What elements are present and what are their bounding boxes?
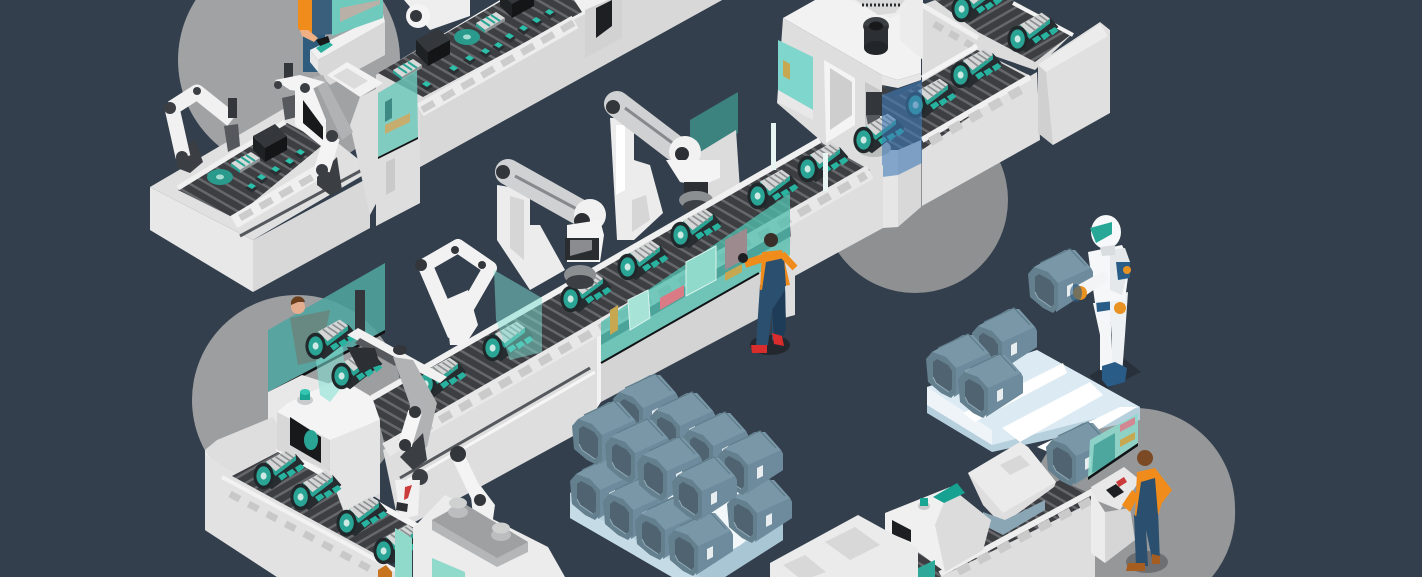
right wall — [922, 72, 1040, 206]
lower link and base — [317, 157, 342, 195]
grey circle: bottom right — [1030, 408, 1235, 577]
long side wall — [376, 0, 722, 226]
crate held — [1028, 249, 1093, 313]
white posts — [771, 123, 776, 170]
spindle — [866, 92, 882, 116]
black cylinder — [863, 17, 889, 35]
back rail — [372, 140, 820, 398]
machine: top left conveyor — [376, 0, 722, 226]
machine: central long conveyor — [372, 123, 883, 530]
machine: bottom right conveyor — [770, 422, 1111, 577]
control console: top left — [310, 0, 385, 85]
machine: right tall unit and conveyors — [777, 0, 1110, 228]
centre block with arm: top left — [274, 62, 383, 215]
block — [327, 62, 383, 97]
head — [1091, 215, 1121, 249]
part on screen — [305, 320, 356, 359]
pallet: left stack of crates — [570, 374, 792, 577]
front rail — [386, 172, 870, 450]
robot arm: bottom left foreground — [395, 406, 428, 520]
control console: bottom right — [1091, 467, 1140, 563]
tall machine — [783, 0, 921, 80]
worker: bottom right — [1122, 450, 1172, 573]
blue glass screen: tall machine — [882, 80, 922, 177]
machine: first short conveyor base — [150, 105, 372, 292]
torso — [1088, 245, 1130, 303]
base — [205, 417, 400, 577]
part under gripper — [331, 350, 382, 389]
holographic screen: top left — [378, 70, 418, 159]
holographic screen: bottom right — [1088, 413, 1138, 480]
parts on belts — [1007, 13, 1058, 52]
arm — [1078, 270, 1108, 298]
inspection unit — [277, 378, 380, 440]
block one — [770, 515, 918, 577]
block three — [968, 442, 1056, 525]
teal beacon — [297, 395, 313, 405]
top conveyor belt — [378, 0, 612, 97]
control panel dots — [856, 0, 905, 15]
grey circle: centre right — [822, 107, 1008, 293]
upper roller arm — [404, 0, 470, 30]
top belt items — [416, 28, 450, 66]
pallet: upper right with crates — [926, 308, 1140, 455]
legs — [1093, 303, 1120, 372]
crate on belt — [1046, 422, 1111, 486]
part under spindle — [857, 139, 891, 157]
holographic screen: central conveyor — [601, 193, 790, 363]
robot arm: centre gantry — [496, 165, 606, 290]
robot arm: left white arm — [415, 246, 490, 345]
lower grooves — [400, 368, 590, 478]
grey circle: bottom left — [192, 295, 402, 505]
gripper and window column — [284, 63, 293, 83]
end block — [585, 0, 622, 58]
block two — [885, 487, 991, 572]
parts on lower belt — [253, 450, 304, 489]
light beam — [316, 345, 345, 402]
worker: middle with red shoes — [738, 233, 795, 355]
belt — [232, 452, 416, 562]
robot arm: far gantry with dim screen — [606, 92, 740, 240]
worker: top left — [298, 0, 332, 72]
machine: bottom left — [205, 263, 424, 577]
parts on belt — [797, 143, 848, 182]
wall under rail, left part — [383, 330, 597, 530]
wall under screen, right part — [601, 235, 793, 402]
holographic beam: central conveyor — [494, 270, 542, 360]
grey band — [313, 75, 353, 140]
belt — [373, 142, 870, 445]
robot: humanoid carrying crate — [1028, 215, 1141, 390]
holographic screen with operator — [268, 263, 385, 392]
upper white arm — [275, 75, 325, 92]
grey circle: top left — [178, 0, 400, 171]
machine: bottom left turntable section — [378, 446, 565, 577]
robot arm: top left, grabbing — [164, 87, 240, 173]
machine screen — [778, 40, 813, 110]
gantry crane: bottom left — [347, 290, 447, 455]
end cap — [1038, 22, 1110, 145]
upper belt section — [922, 0, 1073, 85]
